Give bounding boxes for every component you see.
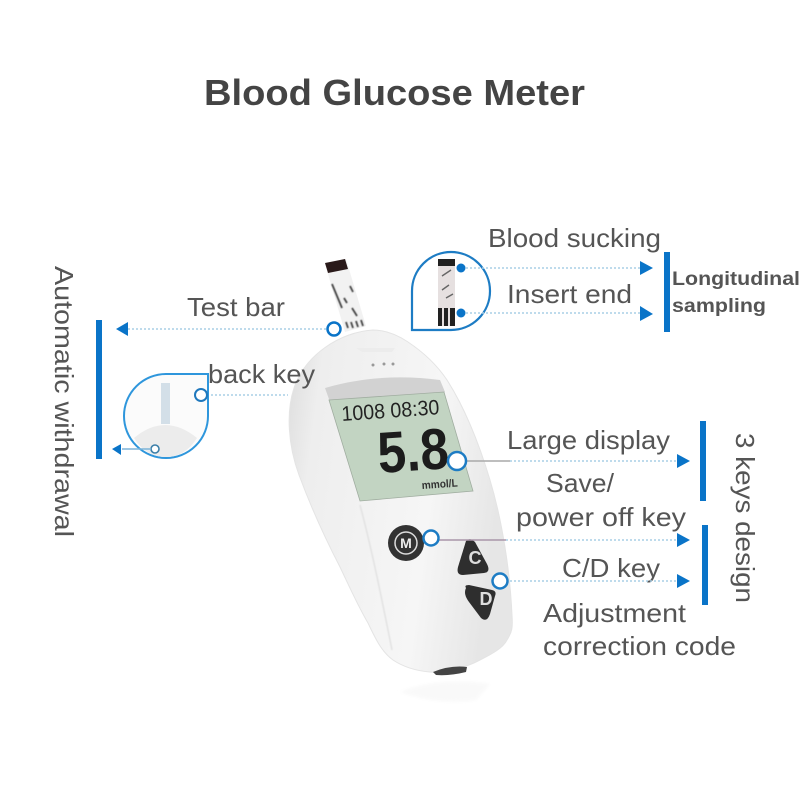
label: Save / power off key: Save/ (546, 468, 615, 498)
label: Blood sucking (466, 223, 661, 275)
callout: test strip ends (412, 252, 490, 330)
label: Blood sucking: Blood sucking (488, 223, 661, 253)
label: Large display (448, 425, 690, 470)
callout meter image (134, 425, 197, 457)
label: Insert end (466, 279, 653, 321)
3 keys design upper bar (700, 421, 706, 501)
C button: C (468, 548, 482, 568)
LCD unit: mmol/L (421, 477, 458, 492)
M button (388, 525, 424, 561)
title: Blood Glucose Meter (204, 72, 585, 113)
callout strip image (161, 383, 170, 424)
C button (458, 539, 488, 575)
longitudinal sampling label: Longitudinal (672, 269, 800, 290)
strip illustration (438, 259, 455, 326)
label: Adjustment correction code: correction code (543, 631, 736, 661)
label: Save / power off key: power off key (516, 502, 686, 532)
label: Test bar: Test bar (187, 292, 285, 322)
inner body contour (360, 505, 392, 650)
automatic withdrawal label: Automatic withdrawal (49, 266, 79, 537)
screen bezel (325, 377, 445, 402)
label: Save / power off key (424, 468, 690, 547)
longitudinal sampling bar (664, 252, 670, 332)
back key label: back key (208, 359, 315, 389)
callout: back key (112, 359, 315, 458)
longitudinal sampling label (672, 269, 800, 317)
test strip (325, 259, 366, 332)
D button (465, 585, 496, 620)
automatic withdrawal bar (96, 320, 102, 459)
label: Insert end: Insert end (507, 279, 632, 309)
reflection under meter (400, 681, 490, 702)
LCD glucose reading: 5.8 (375, 416, 451, 486)
label: C/D key (492, 553, 690, 588)
label: C/D key: C/D key (562, 553, 660, 583)
meter body (289, 330, 512, 672)
D button: D (480, 589, 492, 609)
bottom port (433, 667, 467, 675)
label: Adjustment correction code (543, 598, 736, 661)
longitudinal sampling label: sampling (672, 296, 766, 317)
3 keys design lower bar (702, 525, 708, 605)
meter device (289, 259, 512, 702)
top slot and three dots (356, 348, 395, 366)
label: Adjustment correction code: Adjustment (543, 598, 687, 628)
M button: M (400, 535, 412, 551)
LCD screen (329, 392, 473, 501)
LCD date and time: 1008 08:30 (341, 396, 440, 426)
label: Test bar (116, 292, 340, 336)
3 keys design label: 3 keys design (730, 433, 760, 603)
label: Large display: Large display (507, 425, 670, 455)
